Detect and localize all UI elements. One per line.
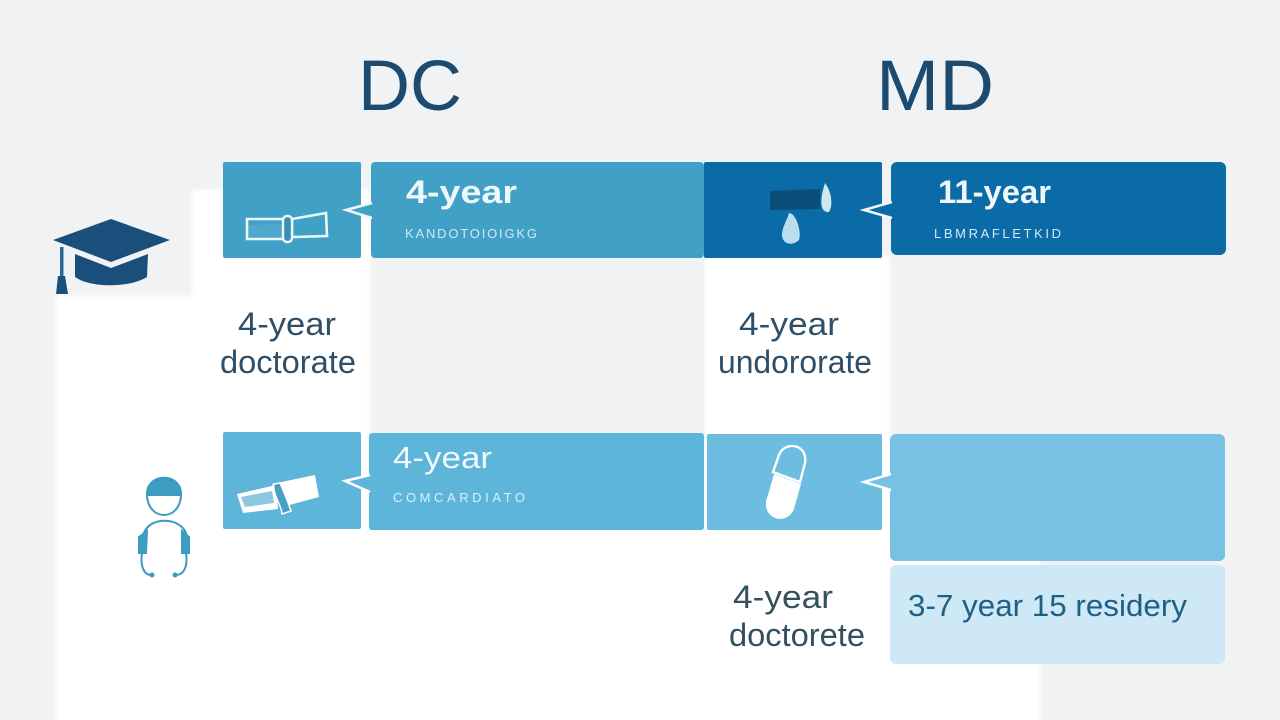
panel: DC row 2 icon box	[223, 432, 361, 529]
title: DC: DC	[358, 47, 462, 126]
icon: dropper	[770, 183, 831, 244]
icon: doctor with stethoscope	[139, 478, 189, 576]
label: MD 4-year undororate: undororate	[718, 344, 872, 380]
panel: MD row 1 icon box	[704, 162, 882, 258]
title: MD: MD	[876, 47, 994, 126]
icon: capsule	[766, 446, 805, 519]
panel: DC row 2 duration box	[345, 433, 704, 530]
caption: LBMRAFLETKID	[934, 226, 1061, 241]
icon: rolled diploma	[237, 475, 319, 514]
icon: graduation cap	[53, 219, 170, 294]
caption: KANDOTOIOIGKG	[405, 226, 537, 241]
panel: DC row 1 duration box	[346, 162, 704, 258]
residency text: 3-7 year 15 residery	[908, 588, 1188, 623]
panel: MD row 1 duration box	[864, 162, 1226, 255]
label: DC 4-year doctorate: 4-year	[238, 306, 336, 342]
label: MD 4-year undororate: 4-year	[739, 306, 839, 342]
panel: MD row 2 icon box	[707, 434, 882, 530]
label: DC 4-year doctorate: doctorate	[220, 344, 356, 380]
heading: 11-year: 11-year	[938, 174, 1051, 210]
panel: residency	[890, 565, 1225, 664]
label: MD lower 4-year doctorate: doctorete	[729, 617, 865, 653]
caption: COMCARDIATO	[393, 490, 525, 505]
heading: 4-year: 4-year	[393, 440, 492, 475]
icon: diploma scroll	[247, 213, 327, 242]
panel: MD row 2 large box	[864, 434, 1225, 561]
label: DC 4-year doctorate	[220, 306, 356, 380]
label: MD lower 4-year doctorate	[729, 579, 865, 653]
label: MD 4-year undororate	[718, 306, 872, 380]
panel: DC row 1 icon box	[223, 162, 361, 258]
label: MD lower 4-year doctorate: 4-year	[733, 579, 833, 615]
heading: 4-year: 4-year	[406, 174, 517, 210]
